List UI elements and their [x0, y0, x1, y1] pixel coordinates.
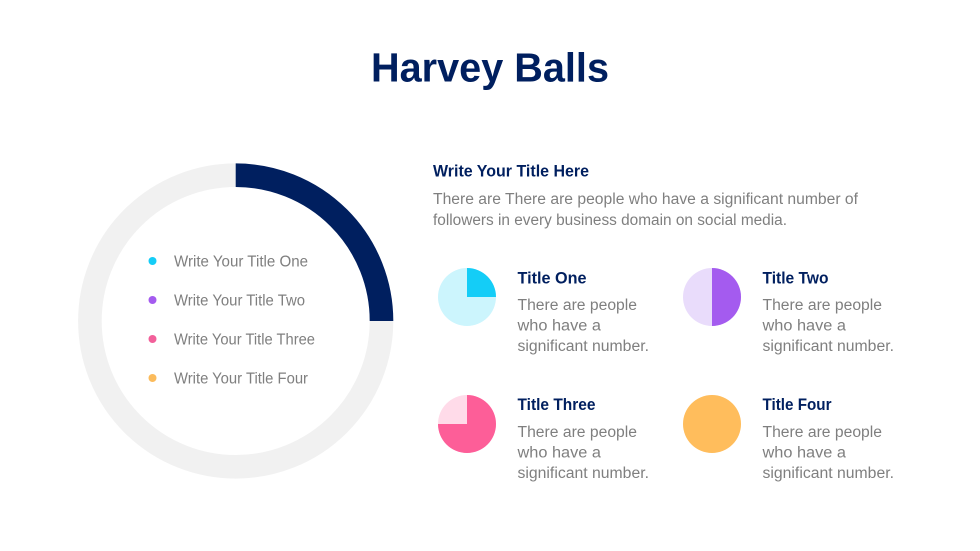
legend [148, 254, 315, 388]
donut chart with legend [90, 175, 382, 467]
text: title three [516, 424, 649, 482]
title: Harvey Balls [371, 44, 609, 90]
text: title three: significant number. [518, 465, 649, 482]
donut value arc: 25 percent [236, 175, 382, 321]
intro body: followers in every business domain on social media. [433, 212, 787, 229]
text: title one: There are people [518, 297, 637, 314]
text: title three: There are people [518, 424, 637, 441]
text: title one [516, 297, 649, 355]
panel: title three [438, 395, 649, 482]
intro body [433, 191, 859, 229]
legend item four: Write Your Title Four [174, 370, 308, 388]
legend item two: Write Your Title Two [174, 292, 305, 310]
legend item three: Write Your Title Three [174, 332, 315, 348]
text: title four: who have a [761, 444, 846, 462]
text: title two [761, 297, 894, 355]
text: title two: who have a [761, 318, 846, 334]
heading: title two: Title Two [762, 270, 828, 288]
text: title four: significant number. [762, 465, 894, 482]
text: title one: who have a [516, 318, 601, 334]
icon: harvey ball 100 percent [683, 395, 741, 453]
panel: title two [683, 268, 894, 355]
text: title two: significant number. [762, 338, 894, 355]
text: title one: significant number. [518, 338, 649, 355]
text: title four [761, 424, 894, 482]
heading: title one: Title One [518, 270, 586, 288]
panel: title four [683, 395, 894, 482]
intro text block [433, 162, 859, 229]
heading: title four: Title Four [762, 396, 832, 414]
intro heading: Write Your Title Here [433, 162, 589, 180]
icon: harvey ball 75 percent [438, 395, 496, 453]
text: title four: There are people [762, 424, 882, 441]
heading: title three: Title Three [518, 396, 596, 414]
legend item one: Write Your Title One [174, 254, 308, 270]
panel: title one [438, 268, 649, 355]
icon: harvey ball 25 percent [438, 268, 496, 326]
icon: harvey ball 50 percent [683, 268, 741, 326]
text: title two: There are people [762, 297, 882, 314]
text: title three: who have a [516, 444, 601, 462]
donut track [90, 175, 382, 467]
intro body: There are There are people who have a significant number of [433, 191, 859, 208]
